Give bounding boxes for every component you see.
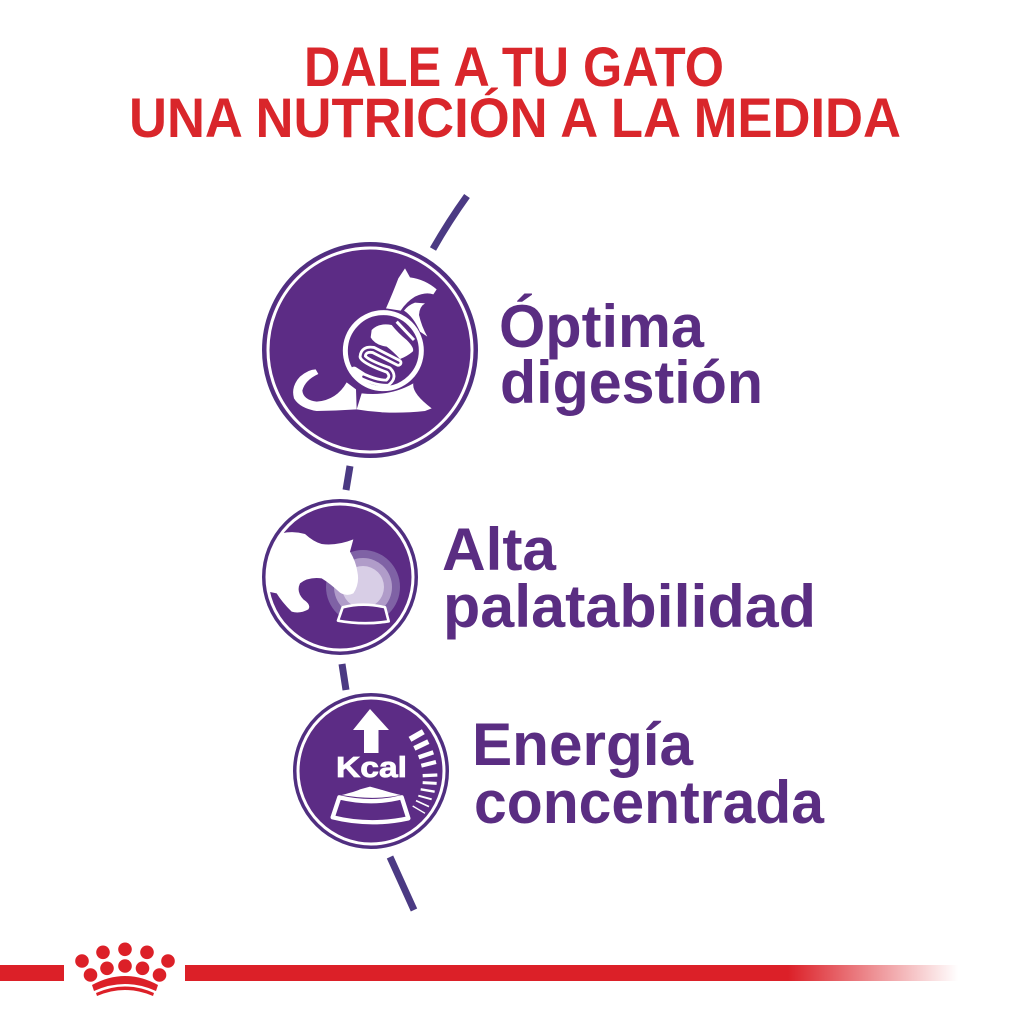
bowl with food <box>333 787 408 822</box>
title: UNA NUTRICIÓN A LA MEDIDA <box>129 86 901 149</box>
heading: optima digestion <box>499 293 763 416</box>
icon: digestion cat badge <box>264 244 476 456</box>
title <box>129 35 901 149</box>
footer rule right <box>185 965 958 981</box>
heading: alta palatabilidad: palatabilidad <box>443 573 816 640</box>
heading: energia concentrada <box>472 711 825 836</box>
title: DALE A TU GATO <box>304 35 724 98</box>
arrow up <box>353 709 389 753</box>
energy gauge ticks <box>410 732 437 813</box>
heading: energia concentrada: Energía <box>472 711 694 778</box>
icon: kcal badge <box>294 694 448 848</box>
heading: alta palatabilidad: Alta <box>442 516 557 583</box>
heading: alta palatabilidad <box>442 516 816 640</box>
icon: palatability cat badge <box>260 500 416 654</box>
aroma glow <box>326 550 400 624</box>
footer rule left <box>0 965 64 981</box>
heading: energia concentrada: concentrada <box>474 769 825 836</box>
icon: royal crown logo <box>75 942 175 996</box>
heading: optima digestion: Óptima <box>499 293 705 360</box>
kcal label: Kcal <box>336 752 407 784</box>
cat silhouette <box>260 532 358 612</box>
timeline line segments <box>342 196 467 910</box>
bowl <box>338 605 389 623</box>
cat silhouette with intestines <box>293 268 437 413</box>
heading: optima digestion: digestión <box>500 349 763 416</box>
